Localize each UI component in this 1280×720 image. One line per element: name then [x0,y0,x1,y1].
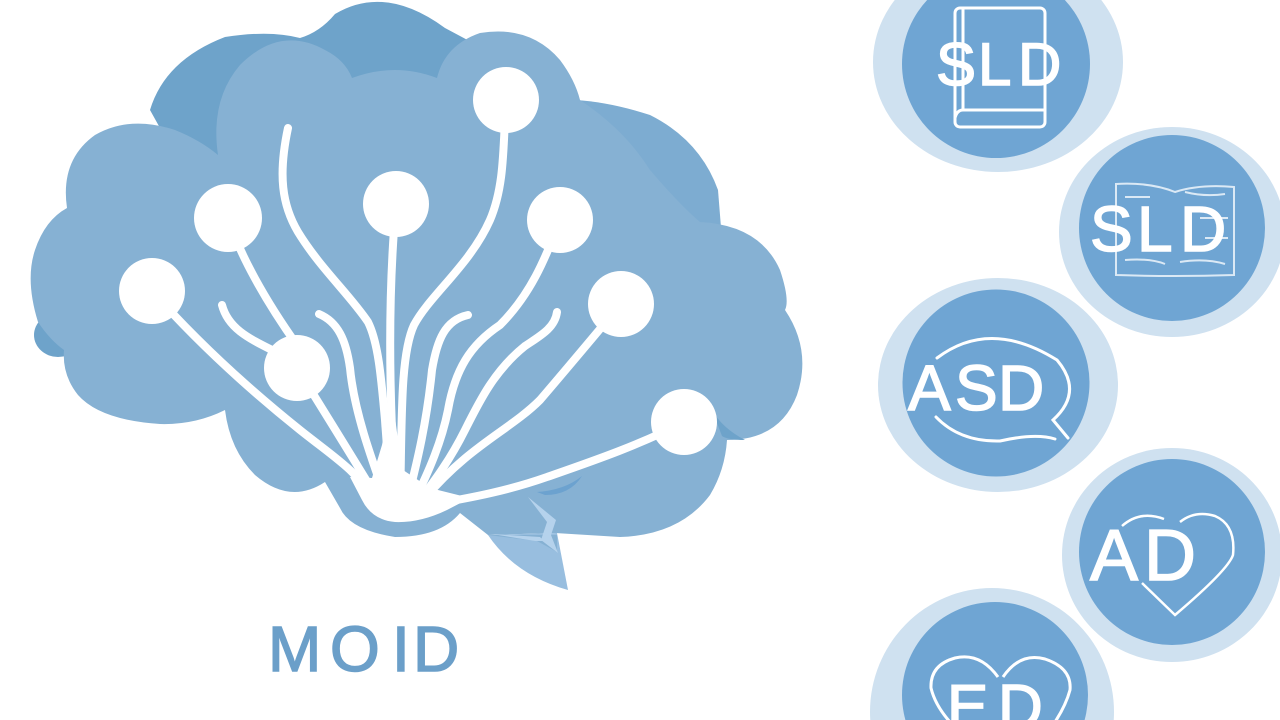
badge: SLD open book: SLD [1090,193,1226,265]
icon: heart [931,657,1070,720]
badge: SLD open book [1059,127,1280,337]
neuron branches [152,100,684,513]
brain stem highlight [492,497,558,553]
badge: ASD speech bubble [878,278,1118,492]
badge: SLD book [873,0,1123,172]
icon: heart [1122,514,1233,615]
neuron base [350,395,470,522]
badge: AD heart [1062,448,1280,662]
brain left shadow [34,313,82,357]
brain lower shadow [537,476,582,495]
brain stem [488,533,568,590]
icon: open book [1116,184,1234,276]
brain illustration [31,2,802,590]
badge: SLD book: SLD [936,31,1061,98]
brain front lobes [31,32,802,537]
brain right shadow [712,410,745,440]
badge: AD heart: AD [1090,516,1196,596]
neuron nodes [119,67,717,455]
brain right lobe [540,100,722,300]
icon: closed book [955,8,1045,127]
badge: ED heart [870,588,1114,720]
icon: speech bubble [936,338,1070,441]
brain stem upper fill [488,535,557,552]
brain back lobes [150,2,580,250]
badge: ASD speech bubble: ASD [908,352,1044,424]
brain label: MOID [268,613,459,685]
